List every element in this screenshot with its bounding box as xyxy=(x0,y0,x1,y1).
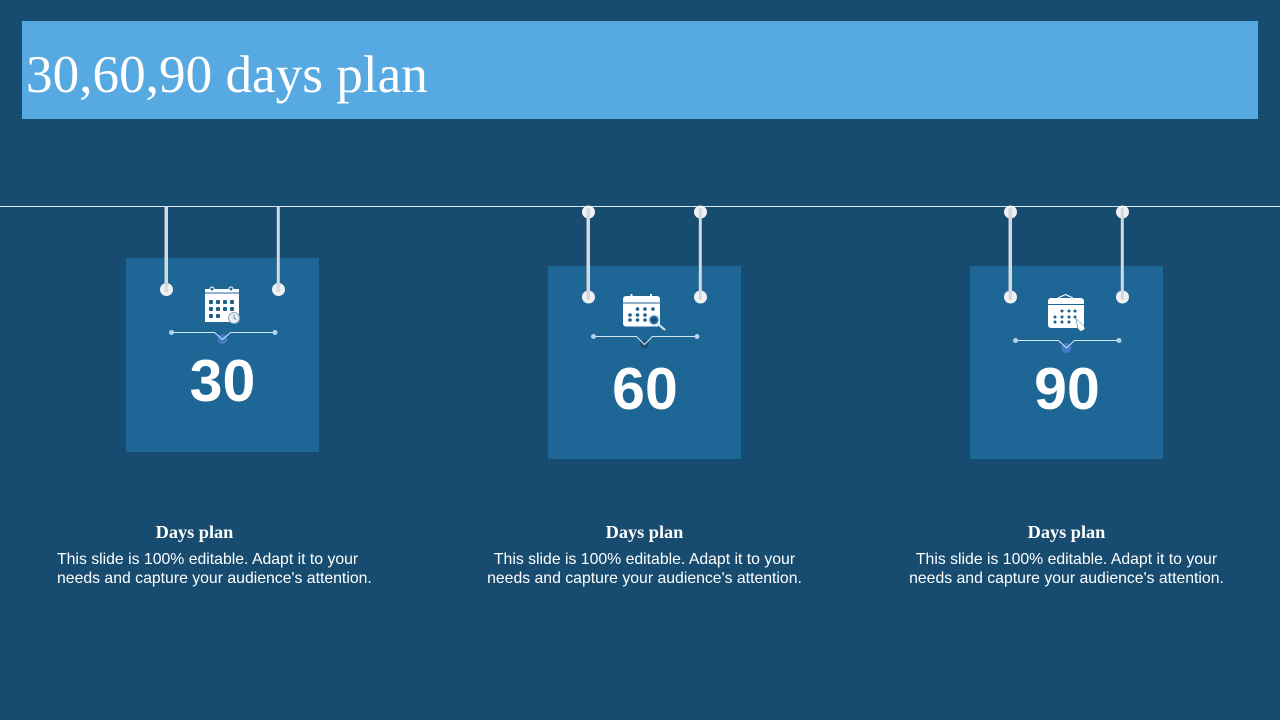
text block: 30 days: Days plan xyxy=(156,522,233,542)
number: 60: 60 xyxy=(612,356,678,422)
title banner xyxy=(22,21,1258,119)
divider with pointer xyxy=(169,330,278,344)
icon: calendar with pointer hand xyxy=(1048,294,1085,332)
text block: 30 days: This slide is 100% editable. Adapt it to your xyxy=(57,551,358,568)
number: 30: 30 xyxy=(190,348,255,414)
icon: calendar with clock xyxy=(205,287,240,324)
panel: 30 days xyxy=(126,206,319,452)
divider with pointer xyxy=(1013,338,1122,353)
text block: 60 days: This slide is 100% editable. Adapt it to your xyxy=(494,551,795,568)
text block: 90 days xyxy=(909,522,1224,587)
text block: 90 days: This slide is 100% editable. Adapt it to your xyxy=(916,551,1217,568)
card: 30 xyxy=(126,258,319,452)
text block: 30 days xyxy=(57,522,372,587)
hanging line xyxy=(0,206,1280,207)
card: 90 xyxy=(970,266,1163,459)
text block: 60 days: needs and capture your audience's attention. xyxy=(487,570,802,587)
text block: 60 days xyxy=(487,522,802,587)
divider with pointer xyxy=(591,334,700,348)
text block: 60 days: Days plan xyxy=(606,522,683,542)
number: 90: 90 xyxy=(1034,356,1100,422)
card: 60 xyxy=(548,266,741,459)
text block: 90 days: needs and capture your audience's attention. xyxy=(909,570,1224,587)
panel: 60 days xyxy=(548,206,741,459)
panel: 90 days xyxy=(970,206,1163,459)
icon: calendar with magnifier xyxy=(623,294,665,330)
text block: 90 days: Days plan xyxy=(1028,522,1105,542)
title: 30,60,90 days plan xyxy=(26,45,428,104)
text block: 30 days: needs and capture your audience's attention. xyxy=(57,570,372,587)
hanger straps xyxy=(582,206,707,304)
hanger straps xyxy=(160,206,285,296)
hanger straps xyxy=(1004,206,1129,304)
